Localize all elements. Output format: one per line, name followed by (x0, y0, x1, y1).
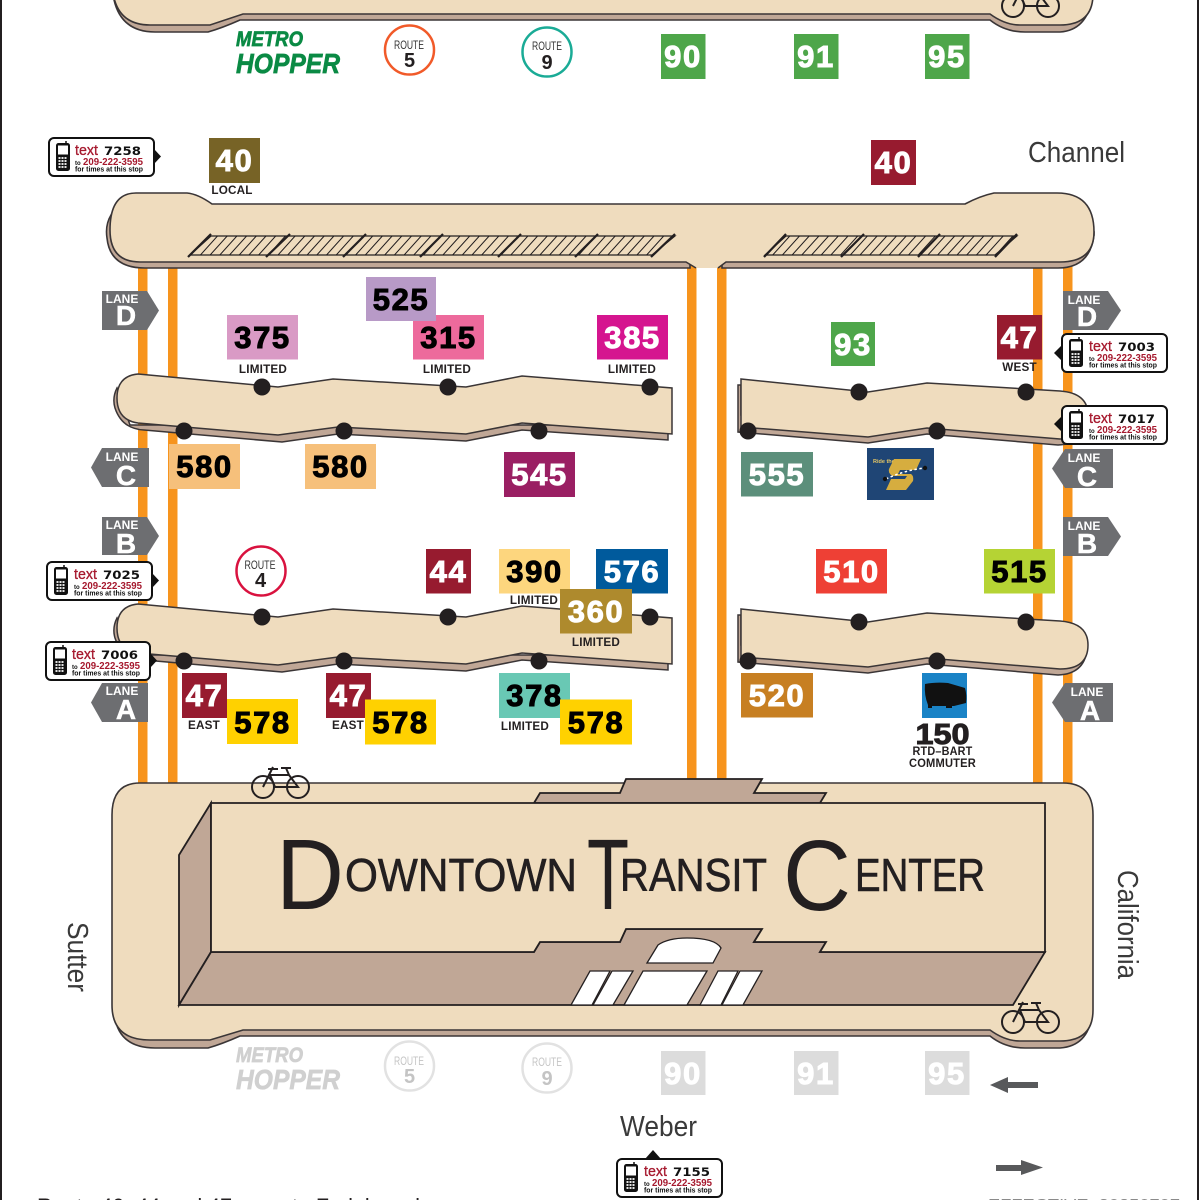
callout: text 7155: 209-222-3595 (652, 1178, 713, 1189)
callout: text 7006: to (72, 665, 78, 671)
street label: Weber: Weber (620, 1111, 697, 1143)
callout: text 7155 (617, 1150, 722, 1197)
route 93: 93 (834, 327, 872, 362)
route 47 west: WEST (1002, 361, 1037, 374)
route 385: LIMITED (608, 363, 656, 376)
route 150 commuter (909, 673, 976, 770)
route 580 (169, 444, 240, 489)
route 47 east (326, 673, 371, 732)
route 315: 315 (420, 320, 477, 355)
title: RANSIT (620, 849, 767, 901)
route 385: 385 (604, 320, 661, 355)
front facade (211, 803, 1045, 952)
title: T (587, 819, 629, 931)
lane C right: C (1077, 461, 1097, 492)
route 375 (227, 315, 298, 376)
route 555: 555 (749, 457, 805, 492)
roof (534, 779, 826, 803)
route 150 commuter: COMMUTER (909, 757, 976, 770)
callout: text 7006 (46, 642, 157, 680)
route 360: 360 (568, 594, 624, 629)
front windows (571, 938, 762, 1005)
base wall (179, 929, 1045, 1005)
icon: bicycle on plaza (252, 767, 309, 798)
route 578 (560, 700, 632, 744)
logo: Ride the S: Ride the (873, 459, 895, 465)
lane D left (102, 291, 159, 331)
callout: text 7006: text (72, 646, 96, 663)
route 44: 44 (430, 554, 467, 589)
route 315 (413, 315, 484, 376)
lane B right (1063, 517, 1121, 559)
route 390: LIMITED (510, 594, 558, 607)
callout: text 7006: for times at this stop (72, 668, 140, 678)
route 91 faded (794, 1051, 838, 1095)
callout: text 7258: 209-222-3595 (83, 157, 144, 168)
route 47 east: EAST (332, 719, 365, 732)
route 90: 90 (664, 39, 702, 74)
title: OWNTOWN (345, 849, 577, 901)
logo: Metro Hopper faded: METRO (236, 1044, 303, 1067)
lane D right: LANE (1068, 293, 1100, 307)
route 525: 525 (373, 282, 429, 317)
lane B left: B (116, 528, 136, 559)
route 390 (499, 549, 570, 607)
title: D (276, 819, 344, 931)
route 580 (305, 444, 376, 489)
callout: text 7003: for times at this stop (1089, 360, 1157, 370)
logo: Ride the S (867, 448, 934, 500)
arrow: eastbound (996, 1160, 1043, 1175)
logo: Metro Hopper faded (236, 1044, 341, 1095)
callout: text 7025: to (74, 585, 80, 591)
callout: text 7258: for times at this stop (75, 164, 143, 174)
lane D left: D (116, 300, 136, 331)
route 40 local (209, 138, 260, 197)
title (276, 819, 985, 932)
route 5 faded (385, 1042, 434, 1090)
route 375: 375 (234, 320, 291, 355)
route 578 (365, 700, 436, 744)
route 385 (597, 315, 668, 376)
lane B left: LANE (106, 518, 138, 532)
route 90 faded (661, 1051, 706, 1095)
route 40 local: LOCAL (211, 184, 253, 197)
logo: Metro Hopper: HOPPER (236, 48, 341, 79)
route 515 (984, 549, 1055, 594)
hatched crosswalk left (188, 234, 675, 257)
callout: text 7258: text (75, 142, 99, 159)
route 90 (661, 34, 706, 79)
top plaza (112, 0, 1093, 32)
callout: text 7017: 209-222-3595 (1097, 425, 1158, 436)
callout: text 7017: to (1089, 429, 1095, 435)
orange lane lines (138, 262, 1072, 787)
route 315: LIMITED (423, 363, 471, 376)
route 9 faded (522, 1044, 572, 1092)
lane C right: LANE (1068, 451, 1100, 465)
route 95: 95 (928, 39, 966, 74)
callout: text 7025: 7025 (103, 568, 140, 582)
route 378: 378 (506, 678, 563, 713)
logo: Metro Hopper (236, 28, 341, 79)
icon: bicycle top plaza (1002, 0, 1059, 17)
callout: text 7003: 7003 (1118, 340, 1155, 354)
route 9: ROUTE (532, 39, 562, 53)
callout: text 7017: for times at this stop (1089, 432, 1157, 442)
street label: Sutter: Sutter (61, 922, 93, 992)
route 40 (871, 140, 916, 185)
route 95 (925, 34, 970, 79)
street label: Channel: Channel (1028, 137, 1125, 169)
callout: text 7025: for times at this stop (74, 588, 142, 598)
callout: text 7025: 209-222-3595 (82, 581, 143, 592)
route 578: 578 (568, 705, 624, 740)
title: C (783, 820, 851, 932)
lane A left (91, 683, 148, 725)
callout: text 7003: to (1089, 357, 1095, 363)
route 40 local: 40 (216, 143, 253, 178)
callout: text 7025 (47, 562, 159, 600)
stop dots (176, 378, 1034, 670)
route 525 (366, 277, 436, 321)
lane D left: LANE (106, 292, 138, 306)
island: lower right (738, 609, 1088, 675)
lane C left: LANE (106, 450, 138, 464)
callout: text 7155: text (644, 1163, 668, 1180)
callout: text 7003 (1054, 334, 1167, 372)
lane A right: A (1080, 695, 1100, 726)
route 515: 515 (991, 554, 1048, 589)
channel plaza (106, 193, 1094, 268)
route 95 faded (925, 1051, 970, 1095)
route 578 (227, 699, 298, 744)
island: upper left (114, 374, 672, 442)
route 47 east (182, 673, 227, 732)
callout: text 7017: text (1089, 410, 1113, 427)
route 360: LIMITED (572, 636, 620, 649)
route 9: 9 (541, 52, 553, 74)
callout: text 7258: 7258 (104, 144, 141, 158)
route 91 faded: 91 (797, 1056, 835, 1091)
callout: text 7025: text (74, 566, 98, 583)
route 9 faded: ROUTE (532, 1055, 562, 1069)
route 150 commuter: RTD–BART (912, 745, 973, 758)
street label: California: California (1111, 870, 1143, 980)
lane D right (1063, 291, 1121, 332)
route 5 faded: 5 (404, 1066, 415, 1088)
callout: text 7017: 7017 (1118, 412, 1155, 426)
route 5 faded: ROUTE (394, 1054, 424, 1068)
route 580: 580 (176, 449, 233, 484)
route 5 (385, 26, 434, 74)
lane A left: LANE (106, 684, 138, 698)
lane A right: LANE (1071, 685, 1103, 699)
lane C left (91, 448, 149, 491)
logo: Metro Hopper: METRO (236, 28, 303, 51)
route 545 (504, 452, 575, 497)
route 578: 578 (234, 705, 291, 740)
callout: text 7155: to (644, 1182, 650, 1188)
route 150 commuter: 150 (916, 719, 970, 751)
route 578: 578 (372, 705, 429, 740)
lane C left: C (116, 460, 136, 491)
lane B right: B (1077, 528, 1097, 559)
route 360 (560, 589, 632, 649)
route 9 (522, 28, 572, 76)
route 390: 390 (506, 554, 563, 589)
route 93 (831, 322, 875, 366)
route 576: 576 (604, 554, 660, 589)
route 47 east: 47 (330, 678, 367, 713)
arrow: westbound (990, 1077, 1038, 1093)
route 9 faded: 9 (541, 1068, 553, 1090)
route 47 west: 47 (1001, 320, 1038, 355)
route 378: LIMITED (501, 720, 549, 733)
lane A left: A (116, 694, 136, 725)
callout: text 7155: for times at this stop (644, 1186, 712, 1194)
route 4: ROUTE (244, 558, 276, 572)
callout: text 7017 (1054, 406, 1167, 444)
lane C right (1052, 449, 1113, 492)
lane A right (1052, 683, 1113, 726)
route 5: 5 (404, 50, 415, 72)
bottom plaza (112, 783, 1093, 1048)
callout: text 7006: 7006 (101, 648, 138, 662)
title: ENTER (855, 849, 985, 901)
callout: text 7003: 209-222-3595 (1097, 353, 1158, 364)
lane B left (102, 517, 159, 559)
callout: text 7155: 7155 (673, 1165, 710, 1179)
route 520: 520 (749, 678, 805, 713)
callout: text 7003: text (1089, 338, 1113, 355)
island: lower left (114, 604, 672, 672)
icon: bicycle lower right (1002, 1002, 1059, 1033)
route 4 (236, 546, 286, 596)
building (179, 779, 1045, 1005)
route 378 (499, 673, 570, 733)
route 47 east: EAST (188, 719, 221, 732)
route 4: 4 (255, 570, 267, 592)
route 375: LIMITED (239, 363, 287, 376)
route 40: 40 (875, 145, 912, 180)
lane D right: D (1077, 301, 1097, 332)
left wall (179, 803, 211, 1005)
route 90 faded: 90 (664, 1056, 702, 1091)
route 91: 91 (797, 39, 835, 74)
route 555 (741, 452, 813, 496)
route 580: 580 (312, 449, 369, 484)
logo: Metro Hopper faded: HOPPER (236, 1064, 341, 1095)
callout: text 7258 (49, 138, 161, 176)
route 510 (816, 549, 887, 594)
route 5: ROUTE (394, 38, 424, 52)
route 47 west (997, 315, 1042, 374)
route 47 east: 47 (186, 678, 223, 713)
callout: text 7006: 209-222-3595 (80, 661, 141, 672)
island: upper right (738, 379, 1088, 445)
route 44 (426, 549, 471, 594)
hatched crosswalk right (764, 234, 1017, 257)
route 91 (794, 34, 838, 79)
route 545: 545 (511, 457, 568, 492)
callout: text 7258: to (75, 161, 81, 167)
route 510: 510 (823, 554, 880, 589)
route 576 (596, 549, 668, 594)
route 95 faded: 95 (928, 1056, 966, 1091)
route 520 (741, 673, 813, 718)
lane B right: LANE (1068, 519, 1100, 533)
